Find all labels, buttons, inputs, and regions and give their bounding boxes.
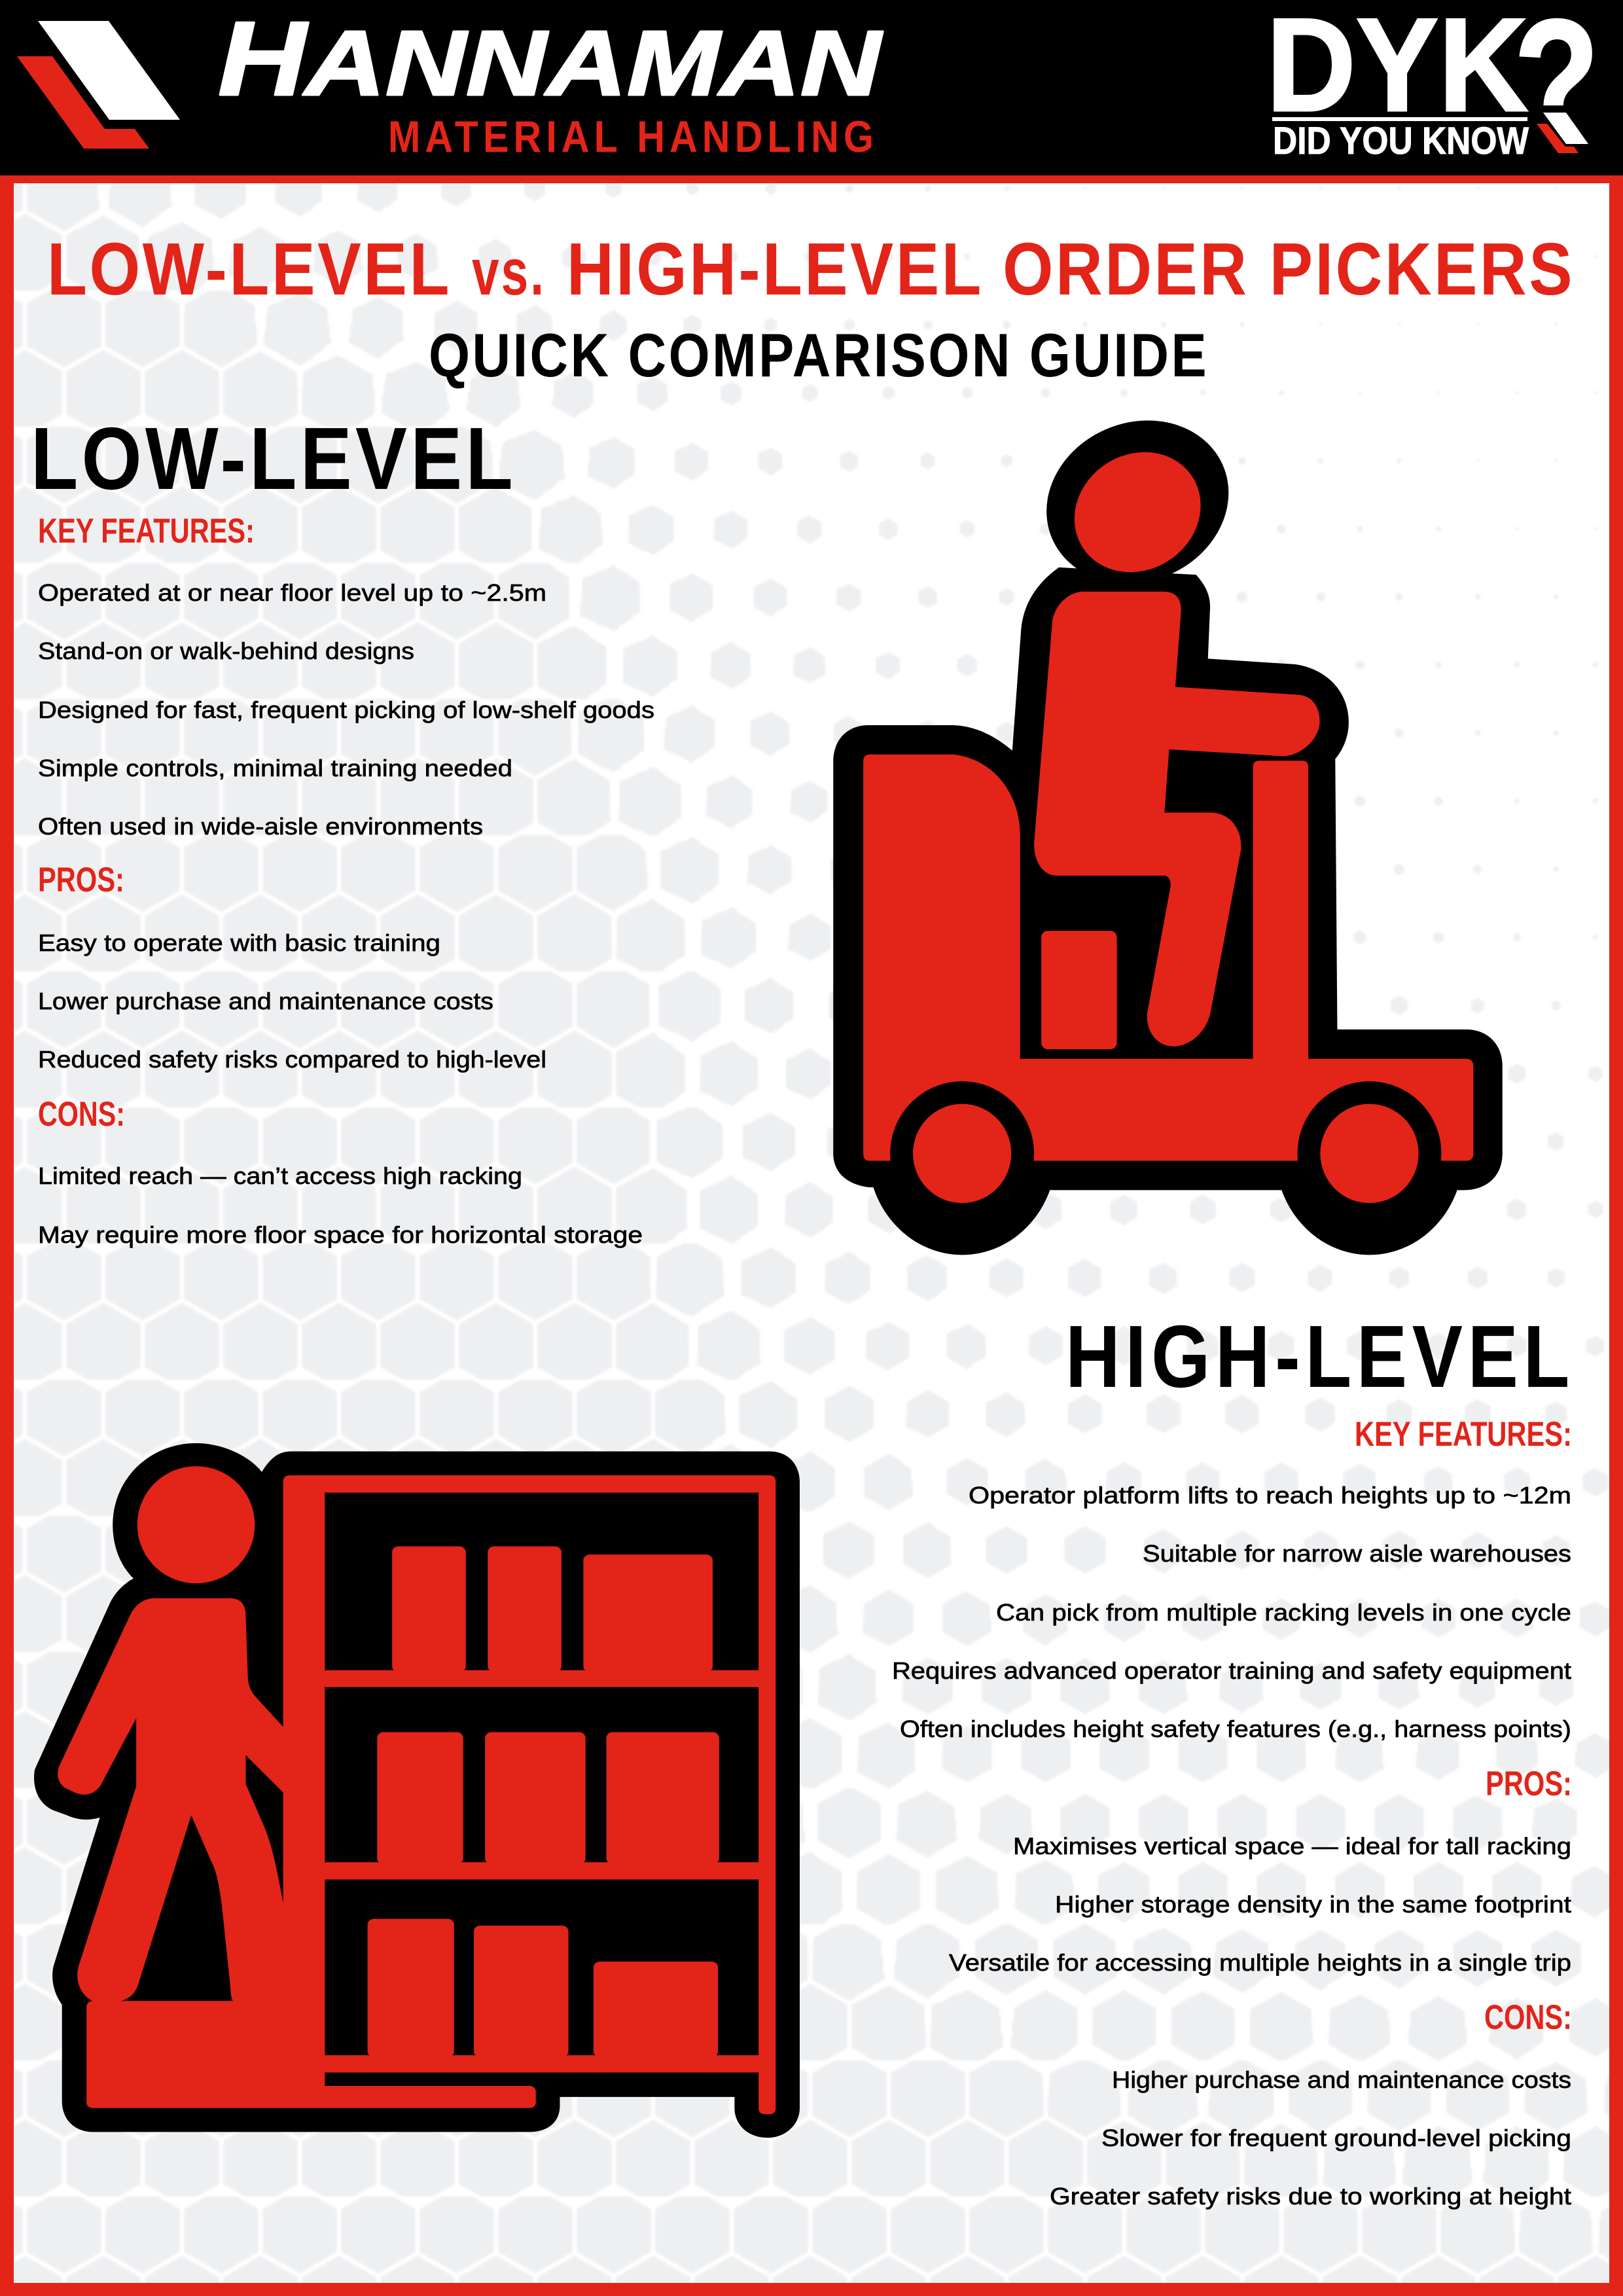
cons list: Slower for frequent ground-level picking <box>1101 2125 1571 2151</box>
heading: low-level: LOW-LEVEL <box>31 409 516 508</box>
company name wordmark: H <box>218 0 309 118</box>
key features list: Stand-on or walk-behind designs <box>38 637 414 664</box>
cons list <box>1050 2066 1571 2210</box>
shelf boxes <box>368 1547 719 2057</box>
heading: pros: PROS: <box>38 861 124 899</box>
title: LOW-LEVEL <box>47 228 452 310</box>
tagline: material handling: MATERIAL HANDLING <box>388 112 878 162</box>
key features list: Often used in wide-aisle environments <box>38 813 483 840</box>
key features list <box>38 579 654 840</box>
pros list: Maximises vertical space — ideal for tall racking <box>1013 1833 1571 1859</box>
company name wordmark: ANNAMAN <box>302 11 883 115</box>
pros list: Higher storage density in the same footprint <box>1055 1891 1571 1918</box>
DYK badge <box>1266 0 1603 178</box>
heading: cons: CONS: <box>38 1095 125 1134</box>
key features list: Designed for fast, frequent picking of low-shelf goods <box>38 696 654 723</box>
icon: Hannaman logo mark <box>17 21 180 149</box>
pros list: Versatile for accessing multiple heights in a single trip <box>949 1949 1571 1976</box>
cons list: May require more floor space for horizontal storage <box>38 1221 643 1248</box>
pros list <box>38 929 546 1073</box>
subtitle: QUICK COMPARISON GUIDE <box>429 321 1209 389</box>
panel: high-level text <box>892 1307 1575 2210</box>
pros list: Easy to operate with basic training <box>38 929 440 956</box>
cons list: Limited reach — can’t access high racking <box>38 1162 522 1189</box>
key features list: Often includes height safety features (e.g., harness points) <box>900 1715 1571 1742</box>
pros list: Reduced safety risks compared to high-level <box>38 1046 546 1073</box>
heading: pros: PROS: <box>1486 1765 1572 1803</box>
shelving frame and step <box>86 1475 776 2114</box>
pros list <box>949 1833 1571 1976</box>
heading: key features: KEY FEATURES: <box>1355 1415 1572 1454</box>
cons list: Higher purchase and maintenance costs <box>1112 2066 1571 2093</box>
cons list <box>38 1162 643 1248</box>
cons list: Greater safety risks due to working at height <box>1050 2183 1571 2210</box>
heading: key features: KEY FEATURES: <box>38 512 255 550</box>
operator figure <box>58 1466 286 2002</box>
title <box>47 228 1575 310</box>
DYK badge: DID YOU KNOW <box>1273 120 1529 162</box>
key features list: Can pick from multiple racking levels in one cycle <box>996 1599 1571 1626</box>
key features list: Requires advanced operator training and safety equipment <box>892 1657 1571 1684</box>
icon: high-level order picker with operator at racking <box>34 1443 800 2138</box>
panel: low-level text <box>31 409 654 1248</box>
title: vs. <box>472 236 546 309</box>
key features list: Simple controls, minimal training needed <box>38 755 512 781</box>
company name wordmark <box>218 0 883 118</box>
heading: cons: CONS: <box>1484 1998 1572 2037</box>
key features list <box>892 1482 1571 1742</box>
key features list: Suitable for narrow aisle warehouses <box>1143 1540 1571 1567</box>
key features list: Operated at or near floor level up to ~2.5m <box>38 579 546 606</box>
header bar <box>0 0 1623 178</box>
icon: low-level order picker with seated operator <box>833 399 1503 1255</box>
pros list: Lower purchase and maintenance costs <box>38 988 493 1014</box>
key features list: Operator platform lifts to reach heights up to ~12m <box>969 1482 1571 1509</box>
